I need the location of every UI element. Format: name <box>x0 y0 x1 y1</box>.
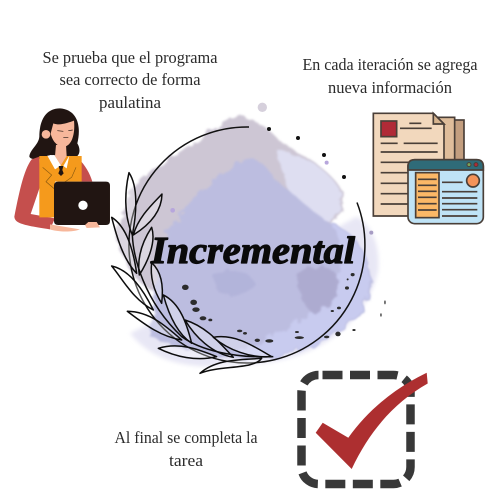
text: top right: En cada iteración se agrega <box>302 55 478 74</box>
icon: documents and browser window <box>373 113 483 224</box>
watercolor background blob <box>118 103 379 367</box>
text: bottom: Al final se completa la <box>114 428 258 447</box>
text: top left: Se prueba que el programa <box>42 48 218 67</box>
text: top left: sea correcto de forma <box>60 70 201 89</box>
circle outline <box>129 127 365 363</box>
text: top right <box>302 55 478 97</box>
icon: dashed checkbox with red check mark <box>302 373 428 484</box>
icon: woman with laptop <box>14 108 110 231</box>
text: top left <box>42 48 218 112</box>
title: Incremental: Incremental <box>150 230 355 272</box>
text: bottom: tarea <box>169 451 204 470</box>
ink splatter <box>182 273 386 343</box>
laurel branch <box>112 173 273 373</box>
decorative black dots <box>267 127 346 179</box>
text: top left: paulatina <box>99 93 162 112</box>
text: top right: nueva información <box>328 78 452 97</box>
text: bottom <box>114 428 258 470</box>
